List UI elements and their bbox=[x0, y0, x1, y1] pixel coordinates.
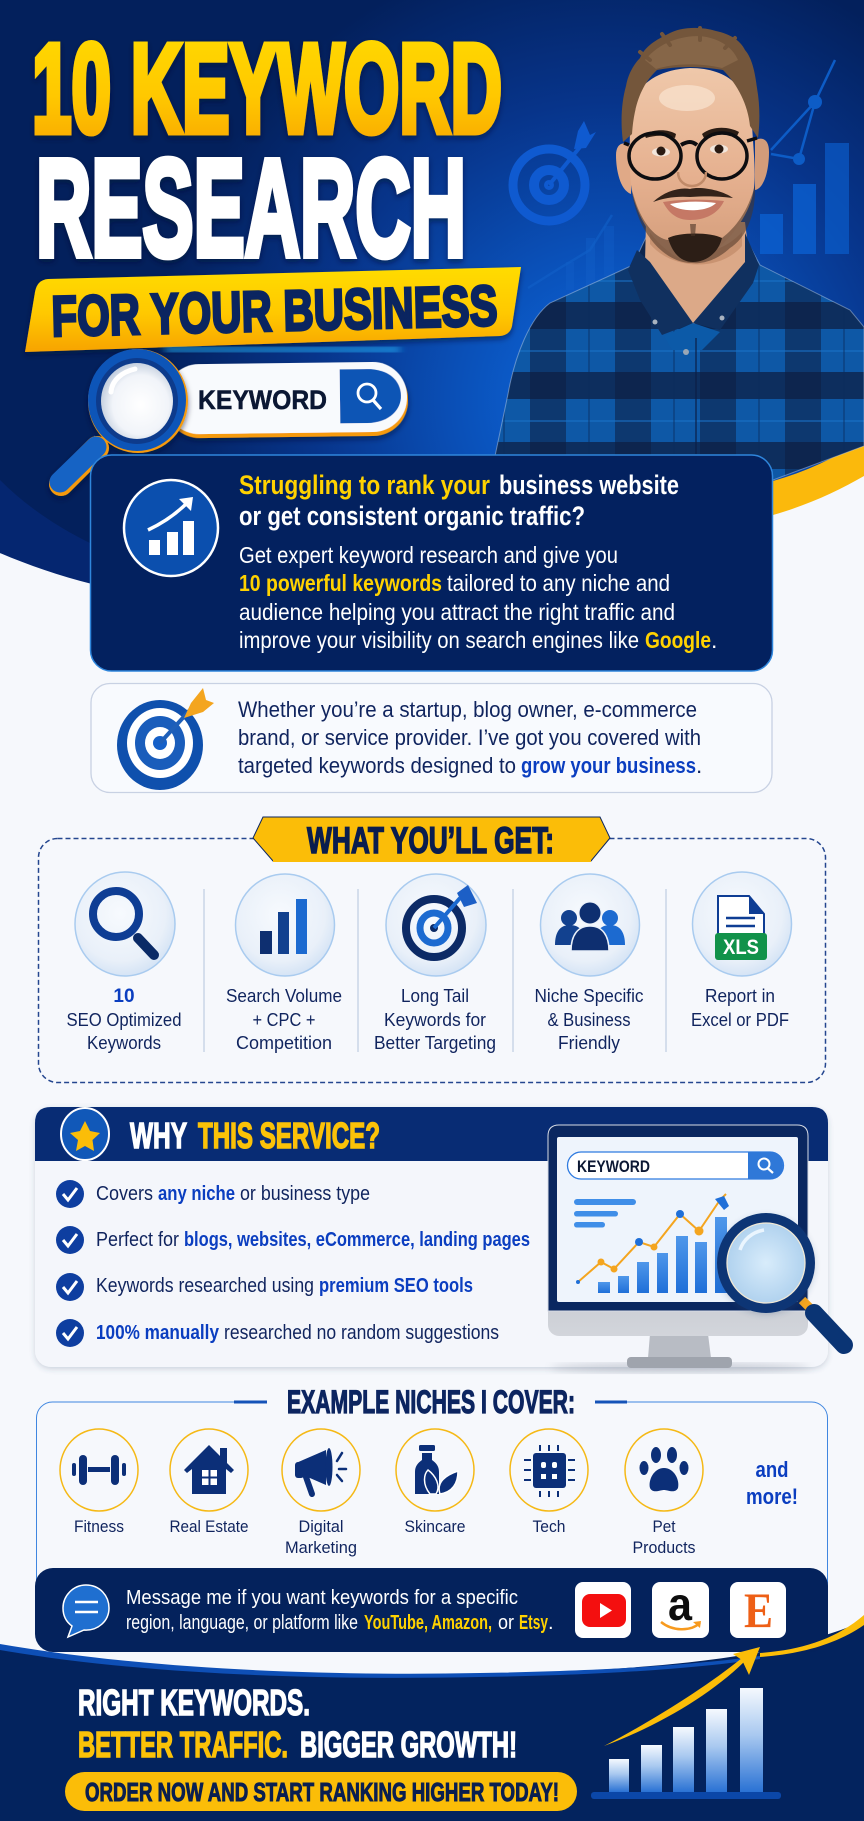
collar bbox=[628, 250, 693, 335]
banner: for your business: FOR YOUR BUSINESS bbox=[51, 274, 498, 349]
footer headline: BIGGER GROWTH! bbox=[300, 1724, 517, 1765]
checklist: any niche bbox=[158, 1183, 235, 1205]
panel: struggling to rank bbox=[90, 455, 772, 671]
message text: or bbox=[498, 1612, 514, 1634]
item: search volume bbox=[226, 874, 342, 1053]
title: 10 keyword: 10 KEYWORD bbox=[32, 18, 502, 159]
portrait: man with glasses in plaid shirt bbox=[490, 28, 864, 480]
item: long tail keywords: Long Tail bbox=[401, 985, 469, 1006]
checklist: Perfect for bbox=[96, 1229, 179, 1251]
nose bbox=[678, 172, 706, 186]
item: 10 seo optimized keywords: 10 bbox=[113, 986, 135, 1007]
niche: real estate: Real Estate bbox=[170, 1517, 248, 1536]
glasses bbox=[624, 133, 757, 179]
niche: skincare: Skincare bbox=[404, 1517, 466, 1536]
and more note: more! bbox=[746, 1484, 798, 1509]
text: body copy bbox=[239, 542, 717, 653]
footer headline: RIGHT KEYWORDS. bbox=[78, 1682, 310, 1723]
checklist: 100% manually bbox=[96, 1322, 220, 1344]
ears bbox=[616, 143, 631, 194]
banner: for your business bbox=[25, 267, 521, 352]
footer headline: BETTER TRAFFIC. bbox=[78, 1724, 288, 1765]
checklist bbox=[56, 1180, 530, 1347]
panel: why this service bbox=[35, 1107, 844, 1373]
checklist: Keywords researched using bbox=[96, 1275, 314, 1297]
item: niche specific: Friendly bbox=[558, 1032, 621, 1053]
text: body copy: Google bbox=[645, 627, 711, 653]
item: niche specific bbox=[534, 874, 644, 1053]
brows bbox=[644, 128, 739, 138]
niche: tech: Tech bbox=[532, 1517, 566, 1536]
item: 10 seo optimized keywords: Keywords bbox=[87, 1032, 161, 1053]
growth arrow and swoosh bbox=[604, 1615, 864, 1746]
niche: skincare bbox=[396, 1429, 474, 1536]
text: body copy: 10 powerful keywords bbox=[239, 570, 442, 596]
message text: region, language, or platform like bbox=[126, 1612, 358, 1634]
screen bar chart bbox=[598, 1217, 727, 1293]
small search icon bbox=[358, 384, 381, 409]
background icon: target bbox=[513, 121, 596, 221]
niche: tech bbox=[510, 1429, 588, 1536]
niche: pet products: Pet bbox=[652, 1517, 676, 1536]
neck bbox=[645, 222, 750, 325]
text: description: Whether you’re a startup, blog owner, e-commerce bbox=[238, 697, 697, 722]
text: body copy: audience helping you attract the right traffic and bbox=[239, 599, 675, 625]
call to action button bbox=[65, 1772, 577, 1811]
stubble and beard bbox=[632, 185, 755, 263]
text: description bbox=[238, 697, 702, 778]
niche: digital marketing bbox=[282, 1429, 360, 1557]
face bbox=[630, 68, 755, 261]
monitor illustration bbox=[548, 1125, 844, 1373]
item: 10 seo optimized keywords bbox=[66, 872, 182, 1053]
item: long tail keywords bbox=[374, 874, 496, 1053]
and more note bbox=[746, 1457, 798, 1509]
search field bbox=[165, 362, 408, 439]
text: description: . bbox=[696, 753, 702, 778]
item: long tail keywords: Better Targeting bbox=[374, 1032, 496, 1053]
text: body copy: . bbox=[711, 627, 717, 653]
text: description: brand, or service provider. I’ve got you covered with bbox=[238, 725, 701, 750]
text: description: grow your business bbox=[521, 753, 696, 778]
section header bar bbox=[35, 1107, 828, 1161]
niche: fitness bbox=[60, 1429, 138, 1536]
message text: Etsy bbox=[519, 1612, 549, 1634]
niche: fitness: Fitness bbox=[74, 1517, 124, 1536]
logo: amazon bbox=[652, 1578, 709, 1638]
item: niche specific: Niche Specific bbox=[534, 985, 644, 1006]
screen search box: KEYWORD bbox=[577, 1157, 650, 1176]
heading bbox=[234, 1384, 627, 1420]
text: description: targeted keywords designed to bbox=[238, 753, 516, 778]
heading: THIS SERVICE? bbox=[198, 1115, 380, 1156]
niche: pet products: Products bbox=[632, 1538, 696, 1557]
checklist: blogs, websites, eCommerce, landing pages bbox=[184, 1229, 530, 1251]
and more note: and bbox=[756, 1457, 788, 1482]
hair bbox=[622, 28, 759, 142]
icon: growth chart badge bbox=[124, 480, 218, 576]
panel: whether you're a startup bbox=[91, 684, 772, 792]
item: report in excel or pdf: Excel or PDF bbox=[691, 1009, 789, 1030]
message text: YouTube, Amazon, bbox=[364, 1612, 492, 1634]
niche: pet products bbox=[625, 1429, 703, 1557]
call to action button: ORDER NOW AND START RANKING HIGHER TODAY! bbox=[85, 1779, 559, 1807]
item: search volume: Competition bbox=[236, 1032, 332, 1053]
item: 10 seo optimized keywords: SEO Optimized bbox=[66, 1009, 182, 1030]
monitor screen bbox=[557, 1137, 798, 1302]
logo: etsy: E bbox=[744, 1582, 773, 1638]
checklist: or business type bbox=[240, 1183, 370, 1205]
logo: etsy bbox=[730, 1582, 786, 1638]
item: report in excel or pdf bbox=[691, 872, 792, 1030]
heading badge: WHAT YOU’LL GET: bbox=[307, 820, 554, 861]
text: body copy: Get expert keyword research and give you bbox=[239, 542, 618, 568]
heading: EXAMPLE NICHES I COVER: bbox=[287, 1384, 575, 1420]
icon: target with arrow bbox=[117, 688, 214, 790]
checklist: Covers bbox=[96, 1183, 153, 1205]
item: report in excel or pdf: Report in bbox=[705, 985, 775, 1006]
checklist: premium SEO tools bbox=[319, 1275, 473, 1297]
footer background bbox=[0, 1620, 864, 1821]
niche: digital marketing: Marketing bbox=[285, 1538, 357, 1557]
text: body copy: improve your visibility on search engines like bbox=[239, 627, 639, 653]
header background bbox=[0, 0, 864, 610]
heading: WHY bbox=[130, 1115, 187, 1156]
icon: chat bubble bbox=[63, 1585, 109, 1637]
keyword label: KEYWORD bbox=[198, 385, 327, 415]
message text: . bbox=[548, 1612, 554, 1634]
logo: amazon: a bbox=[668, 1578, 692, 1630]
background chart bbox=[528, 60, 849, 290]
niche: real estate bbox=[170, 1429, 248, 1536]
checklist: researched no random suggestions bbox=[224, 1322, 499, 1344]
screen search box bbox=[568, 1152, 784, 1179]
shirt bbox=[490, 233, 864, 480]
moustache bbox=[653, 188, 733, 202]
screen trend line bbox=[576, 1194, 729, 1284]
item: report in excel or pdf: XLS bbox=[723, 936, 759, 959]
text: body copy: tailored to any niche and bbox=[447, 570, 670, 596]
screen text lines bbox=[574, 1199, 636, 1228]
text: headline: Struggling to rank your bbox=[239, 470, 490, 500]
magnifier bbox=[60, 349, 188, 484]
text: headline bbox=[239, 470, 679, 531]
mouth bbox=[663, 200, 724, 220]
eyes bbox=[652, 148, 670, 156]
message text bbox=[126, 1587, 554, 1634]
niche: digital marketing: Digital bbox=[298, 1517, 344, 1536]
magnifier over screen bbox=[717, 1213, 844, 1345]
growth bar chart bbox=[591, 1688, 781, 1799]
panel: what you'll get bbox=[38, 817, 826, 1082]
yellow swoosh bbox=[773, 440, 864, 515]
item: long tail keywords: Keywords for bbox=[384, 1009, 486, 1030]
heading bbox=[130, 1115, 380, 1156]
panel: example niches bbox=[36, 1384, 828, 1612]
footer headline bbox=[78, 1682, 517, 1765]
text: headline: or get consistent organic traffic? bbox=[239, 501, 585, 531]
item: niche specific: & Business bbox=[548, 1009, 630, 1030]
item: search volume: Search Volume bbox=[226, 985, 342, 1006]
title: research: RESEARCH bbox=[36, 132, 466, 286]
message text: Message me if you want keywords for a specific bbox=[126, 1587, 518, 1609]
text: headline: business website bbox=[499, 470, 679, 500]
item: search volume: + CPC + bbox=[252, 1009, 316, 1030]
icon: star badge bbox=[61, 1108, 109, 1160]
logo: youtube bbox=[575, 1582, 631, 1638]
search bar with magnifier bbox=[60, 349, 408, 484]
message bar bbox=[35, 1568, 828, 1652]
